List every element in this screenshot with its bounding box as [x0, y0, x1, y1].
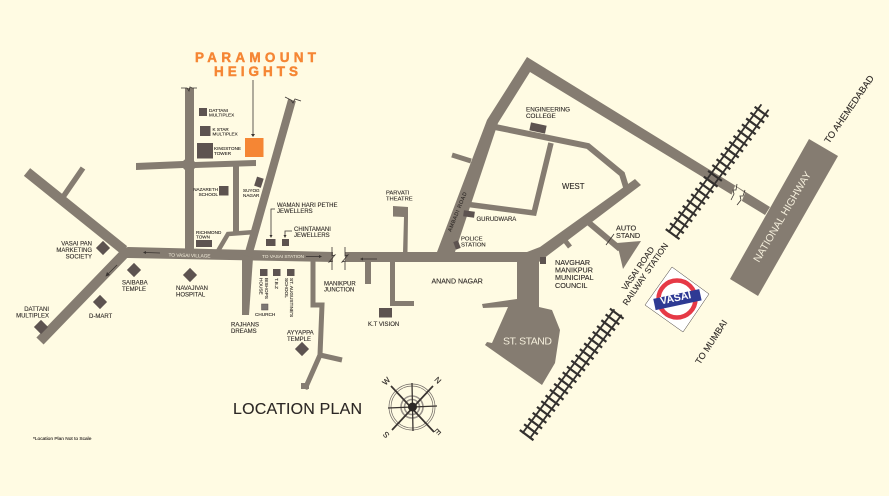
- Gurudwara: GURUDWARA: [476, 217, 516, 223]
- Church: CHURCH: [255, 312, 275, 317]
- project site marker: [245, 138, 264, 157]
- Kingstone tower: KINGSTONE: [214, 146, 241, 151]
- St Augustine's School: [284, 269, 294, 317]
- landmarks west: [16, 241, 314, 356]
- Manikpur Junction: MANIKPUR: [324, 282, 356, 288]
- road: Rajhans road: [242, 255, 253, 315]
- Chintamani Jewellers: CHINTAMANI: [294, 227, 331, 233]
- Auto Stand: AUTO: [616, 224, 636, 232]
- Vasai Road Railway Station: RAILWAY STATION: [620, 241, 670, 307]
- central road arrow: [360, 258, 377, 260]
- St Augustine's School: ST. AUGUSTINE'S: [289, 278, 294, 317]
- Vasai Pan Marketing Society: [56, 241, 110, 260]
- To Mumbai: TO MUMBAI: [693, 318, 729, 366]
- road labels and arrows: [106, 251, 377, 276]
- road: Amadi road and north highway link: [437, 57, 770, 252]
- St. Stand: ST. STAND: [503, 336, 552, 348]
- project title: PARAMOUNT: [195, 50, 317, 65]
- national highway: [730, 139, 838, 296]
- blue band: [653, 289, 702, 310]
- K.T Vision: [368, 308, 399, 328]
- Richmond Town: TOWN: [196, 234, 210, 240]
- Navghar Manikpur Municipal Council: MUNICIPAL: [555, 273, 594, 282]
- Bishops House: HOUSE: [258, 278, 264, 295]
- St Augustine's School: SCHOOL: [284, 278, 289, 298]
- To Vasai Station: [262, 254, 322, 260]
- Suyog Nagar: [243, 177, 264, 198]
- compass rings: [389, 384, 435, 430]
- road: auto stand: [563, 222, 641, 269]
- Waman Hari Pethe Jewellers: JEWELLERS: [277, 209, 313, 215]
- K Star multiplex: MULTIPLEX: [212, 132, 238, 136]
- label: national highway: NATIONAL HIGHWAY: [751, 169, 814, 265]
- Nazareth school: [193, 186, 228, 197]
- project title: HEIGHTS: [214, 64, 298, 79]
- To Vasai Village: TO VASAI VILLAGE: [168, 253, 211, 260]
- Engineering College: COLLEGE: [526, 113, 556, 120]
- Ayyappa Temple: TEMPLE: [287, 337, 311, 343]
- road network: [27, 57, 770, 389]
- K Star multiplex: [200, 126, 238, 136]
- Dattani Multiplex west: DATTANI: [24, 307, 49, 313]
- south-west arrow: [106, 265, 117, 276]
- Navghar Manikpur Municipal Council: COUNCIL: [555, 281, 587, 290]
- badge diamond: [645, 267, 709, 332]
- Vasai Pan Marketing Society: VASAI PAN: [61, 242, 92, 248]
- K.T Vision: K.T VISION: [368, 322, 399, 328]
- arrow to project: [251, 80, 255, 137]
- road: south-west branch: [40, 251, 127, 341]
- Navajivan Hospital: [176, 268, 208, 298]
- Dattani Multiplex west: MULTIPLEX: [16, 314, 49, 320]
- scale note: *Location Plan Not to Scale: [33, 436, 92, 442]
- Rajhans Dreams: DREAMS: [231, 329, 257, 335]
- Nazareth school: NAZARETH: [193, 187, 218, 192]
- road: central main road: [345, 179, 641, 385]
- road: cross road: [136, 156, 256, 174]
- Rajhans Dreams: RAJHANS: [231, 322, 259, 328]
- Bishops House: BISHOPS: [264, 278, 269, 299]
- red ring: [658, 280, 696, 318]
- Auto Stand: STAND: [616, 231, 640, 240]
- Nazareth school: SCHOOL: [199, 192, 218, 197]
- Vasai Road Railway Station: VASAI ROAD: [619, 245, 656, 292]
- Ayyappa Temple: [287, 330, 314, 356]
- Navghar Manikpur Municipal Council: [540, 257, 594, 290]
- landmarks north: [193, 108, 264, 247]
- road: stub at Manikpur road end: [301, 383, 309, 389]
- Manikpur Junction: JUNCTION: [324, 288, 354, 294]
- road: southern stubs: [365, 260, 414, 306]
- compass letters: S: [381, 430, 391, 440]
- road: west main road: [118, 247, 333, 262]
- road: stub off Amadi: [452, 155, 471, 161]
- West: WEST: [562, 182, 585, 191]
- Parvati Theatre: THEATRE: [386, 196, 413, 202]
- To Vasai Station: TO VASAI STATION: [262, 254, 305, 260]
- railway: upper track: [668, 104, 769, 238]
- road: inner loop: [465, 143, 551, 213]
- road: north vertical road: [185, 88, 194, 250]
- Navajivan Hospital: HOSPITAL: [176, 292, 206, 298]
- compass letters: W: [380, 375, 393, 387]
- road: short vertical: [233, 165, 239, 233]
- road breaks: [181, 87, 348, 270]
- Richmond Town: RICHMOND: [196, 230, 222, 235]
- compass letters: [380, 375, 443, 440]
- Navghar Manikpur Municipal Council: MANIKPUR: [555, 266, 593, 274]
- road: Parvati theatre spur: [393, 206, 408, 252]
- Vasai Pan Marketing Society: MARKETING: [56, 248, 92, 254]
- Chintamani Jewellers: [282, 227, 331, 246]
- jewellers: [266, 203, 337, 246]
- Dattani multiplex north: MULTIPLEX: [209, 112, 234, 118]
- Chintamani Jewellers: JEWELLERS: [294, 233, 330, 239]
- Amadi Road label: AMBADI ROAD: [447, 191, 469, 233]
- project title: [195, 50, 317, 79]
- Bishops House: [258, 269, 269, 299]
- road: Richmond link: [218, 232, 255, 251]
- compass: [380, 375, 443, 440]
- compass spokes: [388, 383, 437, 432]
- compass centre: [408, 402, 417, 412]
- Location Plan heading: LOCATION PLAN: [233, 401, 362, 418]
- Vasai station badge: [645, 267, 709, 332]
- Richmond Town: [196, 230, 222, 247]
- compass letters: N: [432, 375, 443, 386]
- road: highway link break: [731, 184, 745, 205]
- Gurudwara: [463, 210, 516, 223]
- Saibaba Temple: [122, 263, 148, 293]
- Dattani Multiplex west: [16, 307, 49, 334]
- D-Mart: [89, 295, 113, 320]
- road: north-west branch: [27, 168, 124, 250]
- Suyog Nagar: SUYOG: [243, 188, 260, 193]
- Police Station: STATION: [461, 242, 486, 248]
- Vasai Pan Marketing Society: SOCIETY: [66, 254, 92, 260]
- road: engineering college road: [495, 127, 626, 187]
- central and east labels: [368, 73, 876, 366]
- Dattani multiplex north: [199, 108, 234, 118]
- Police Station: POLICE: [461, 236, 483, 242]
- To Ahemedabad: TO AHEMEDABAD: [822, 73, 876, 145]
- landmarks along vertical labels: [255, 269, 294, 317]
- D-Mart: D-MART: [89, 314, 113, 320]
- To Vasai Village: [143, 251, 211, 260]
- road: diagonal to north: [248, 100, 292, 256]
- Waman Hari Pethe Jewellers: [266, 203, 337, 246]
- Engineering College: ENGINEERING: [526, 106, 570, 114]
- Kingstone tower: [197, 143, 241, 158]
- Parvati Theatre: PARVATI: [386, 190, 409, 196]
- Waman Hari Pethe Jewellers: WAMAN HARI PETHE: [277, 203, 337, 209]
- K Star multiplex: K STAR: [212, 127, 229, 132]
- Kingstone tower: TOWER: [214, 151, 232, 156]
- Suyog Nagar: NAGAR: [243, 193, 260, 198]
- railway: lower track: [522, 309, 622, 439]
- compass letters: E: [433, 427, 443, 437]
- badge label: VASAI: [659, 289, 692, 307]
- Navajivan Hospital: NAVAJIVAN: [176, 286, 208, 292]
- T.B.Z: T.B.Z: [274, 278, 279, 289]
- Police Station: [453, 236, 486, 250]
- Dattani multiplex north: DATTANI: [209, 108, 228, 113]
- Saibaba Temple: SAIBABA: [122, 280, 148, 286]
- Ayyappa Temple: AYYAPPA: [287, 330, 314, 336]
- Engineering College: [526, 106, 570, 134]
- Saibaba Temple: TEMPLE: [122, 287, 146, 293]
- Navghar Manikpur Municipal Council: NAVGHAR: [555, 258, 590, 267]
- Anand Nagar: ANAND NAGAR: [432, 278, 483, 286]
- road: Manikpur road: [305, 260, 342, 389]
